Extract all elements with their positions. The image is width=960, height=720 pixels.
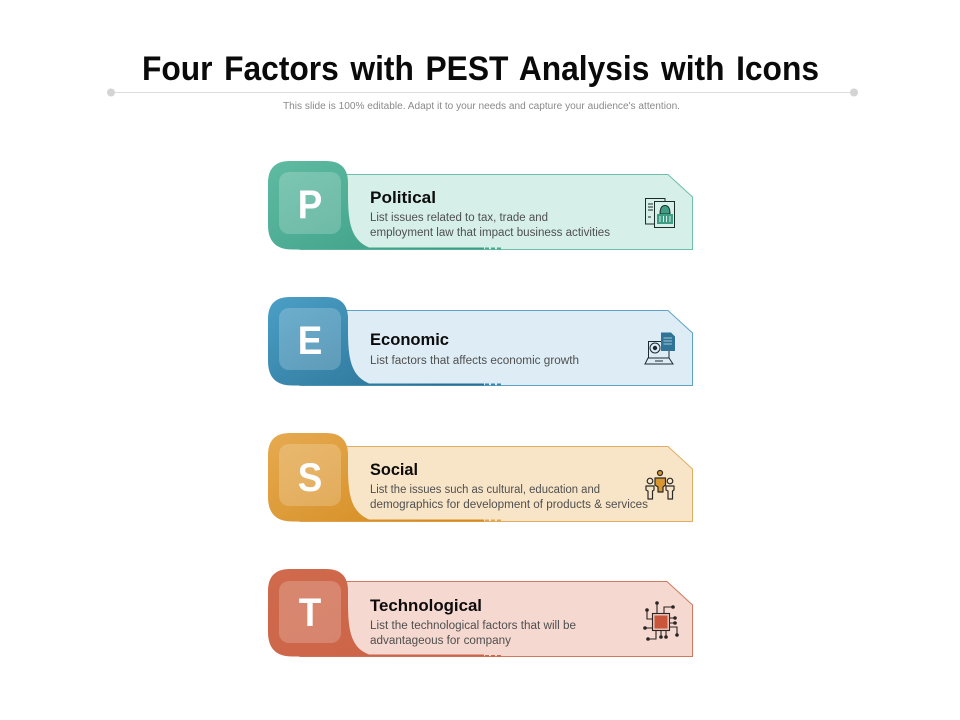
description: social [370,484,648,511]
title rule [107,88,858,96]
description: technological: List the technological factors that will be [370,620,576,632]
icon: microchip [643,601,679,641]
badge: T [268,569,503,656]
icon: laptop with document [645,332,675,364]
description: social: List the issues such as cultural, education and [370,484,600,496]
icon: group of people [646,470,674,499]
heading: political: Political [370,189,436,207]
badge: E: E [298,319,322,363]
badge: P [268,161,503,250]
panel: economic [268,297,692,386]
title: Four Factors with PEST Analysis with Icons [142,50,819,88]
description: political: employment law that impact business activities [370,227,610,239]
description: social: demographics for development of products & services [370,499,648,511]
description: political [370,212,610,239]
badge: E [268,297,503,386]
description: technological [370,620,576,647]
subtitle: This slide is 100% editable. Adapt it to your needs and capture your audience's attention. [283,101,680,112]
heading: social: Social [370,461,418,479]
panel: social [268,433,692,522]
description: technological: advantageous for company [370,635,511,647]
heading: technological: Technological [370,597,482,615]
badge: S: S [298,456,322,500]
panel: political [268,161,692,250]
description: political: List issues related to tax, trade and [370,212,548,224]
badge: S [268,433,503,522]
icon: government document [646,198,674,228]
description: economic: List factors that affects economic growth [370,355,579,367]
panel: technological [268,569,692,656]
badge: P: P [298,183,322,227]
heading: economic: Economic [370,331,449,349]
badge: T: T [299,591,322,635]
